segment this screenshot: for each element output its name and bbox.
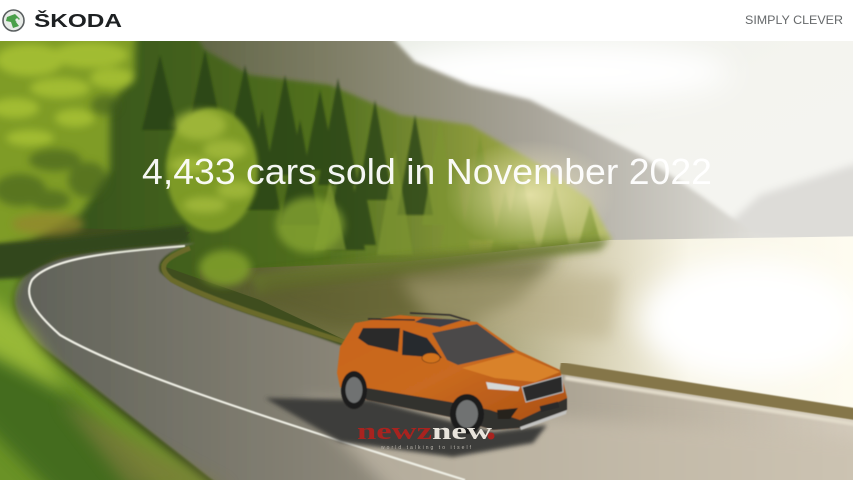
bright grass highlight <box>0 290 70 395</box>
front side window <box>402 330 442 358</box>
wing mirror <box>422 353 440 363</box>
title: 4,433 cars sold in November 2022 <box>142 151 712 192</box>
road surface <box>14 243 853 480</box>
watermark: world talking to itself <box>381 445 472 451</box>
sunlit conifer trees <box>316 142 600 255</box>
header bar <box>0 0 853 41</box>
roadside verge <box>8 228 344 480</box>
rear side window <box>358 328 400 352</box>
car: orange SUV <box>337 313 567 434</box>
watermark <box>357 419 494 451</box>
left grass foreground <box>0 275 208 480</box>
bonnet highlight <box>462 353 560 382</box>
grass dark streaks <box>0 352 148 480</box>
forest hillside <box>47 41 613 279</box>
top-left tree canopy <box>0 20 136 250</box>
sky <box>394 41 853 216</box>
sunroof <box>415 318 463 327</box>
dark trees under canopy <box>0 225 190 280</box>
bright water shine <box>640 260 853 380</box>
rear wheel <box>341 371 367 409</box>
sun glow over forest <box>452 148 600 244</box>
lake tree reflection <box>255 255 560 330</box>
shaded foliage clusters <box>0 95 119 210</box>
white road edge line <box>29 246 465 480</box>
tagline: SIMPLY CLEVER <box>745 13 843 27</box>
fog lamp and bumper <box>497 408 518 419</box>
grille <box>522 376 563 402</box>
watermark: new <box>432 419 493 445</box>
road motion blur band <box>300 400 853 480</box>
central leafy tree <box>166 108 344 286</box>
guard rail right <box>560 368 853 418</box>
olive blur at grass edge <box>66 405 218 480</box>
mountain ridge <box>195 41 735 240</box>
brand name: ŠKODA <box>34 10 122 31</box>
reflection colour band <box>400 275 620 340</box>
lower body trim <box>364 388 568 431</box>
icon: Skoda logo <box>3 10 24 31</box>
roof rails <box>368 313 470 321</box>
number plate <box>540 402 559 412</box>
lake <box>200 236 853 407</box>
forest foot blending into lake <box>250 238 610 295</box>
warm lower foliage <box>12 213 84 235</box>
lower guard rail strip <box>565 378 853 428</box>
car shadow on road <box>265 398 547 457</box>
bumper skid plate <box>520 410 567 430</box>
car body <box>337 315 567 430</box>
distant haze cloud <box>390 42 730 102</box>
dark conifer trees <box>142 50 433 250</box>
far right mountain <box>734 164 853 238</box>
windscreen <box>432 324 515 365</box>
front wheel <box>450 394 484 434</box>
headlight <box>486 382 520 391</box>
guard rail left <box>164 248 345 342</box>
watermark: newz <box>357 419 433 445</box>
sunlit foliage clusters <box>0 42 134 146</box>
